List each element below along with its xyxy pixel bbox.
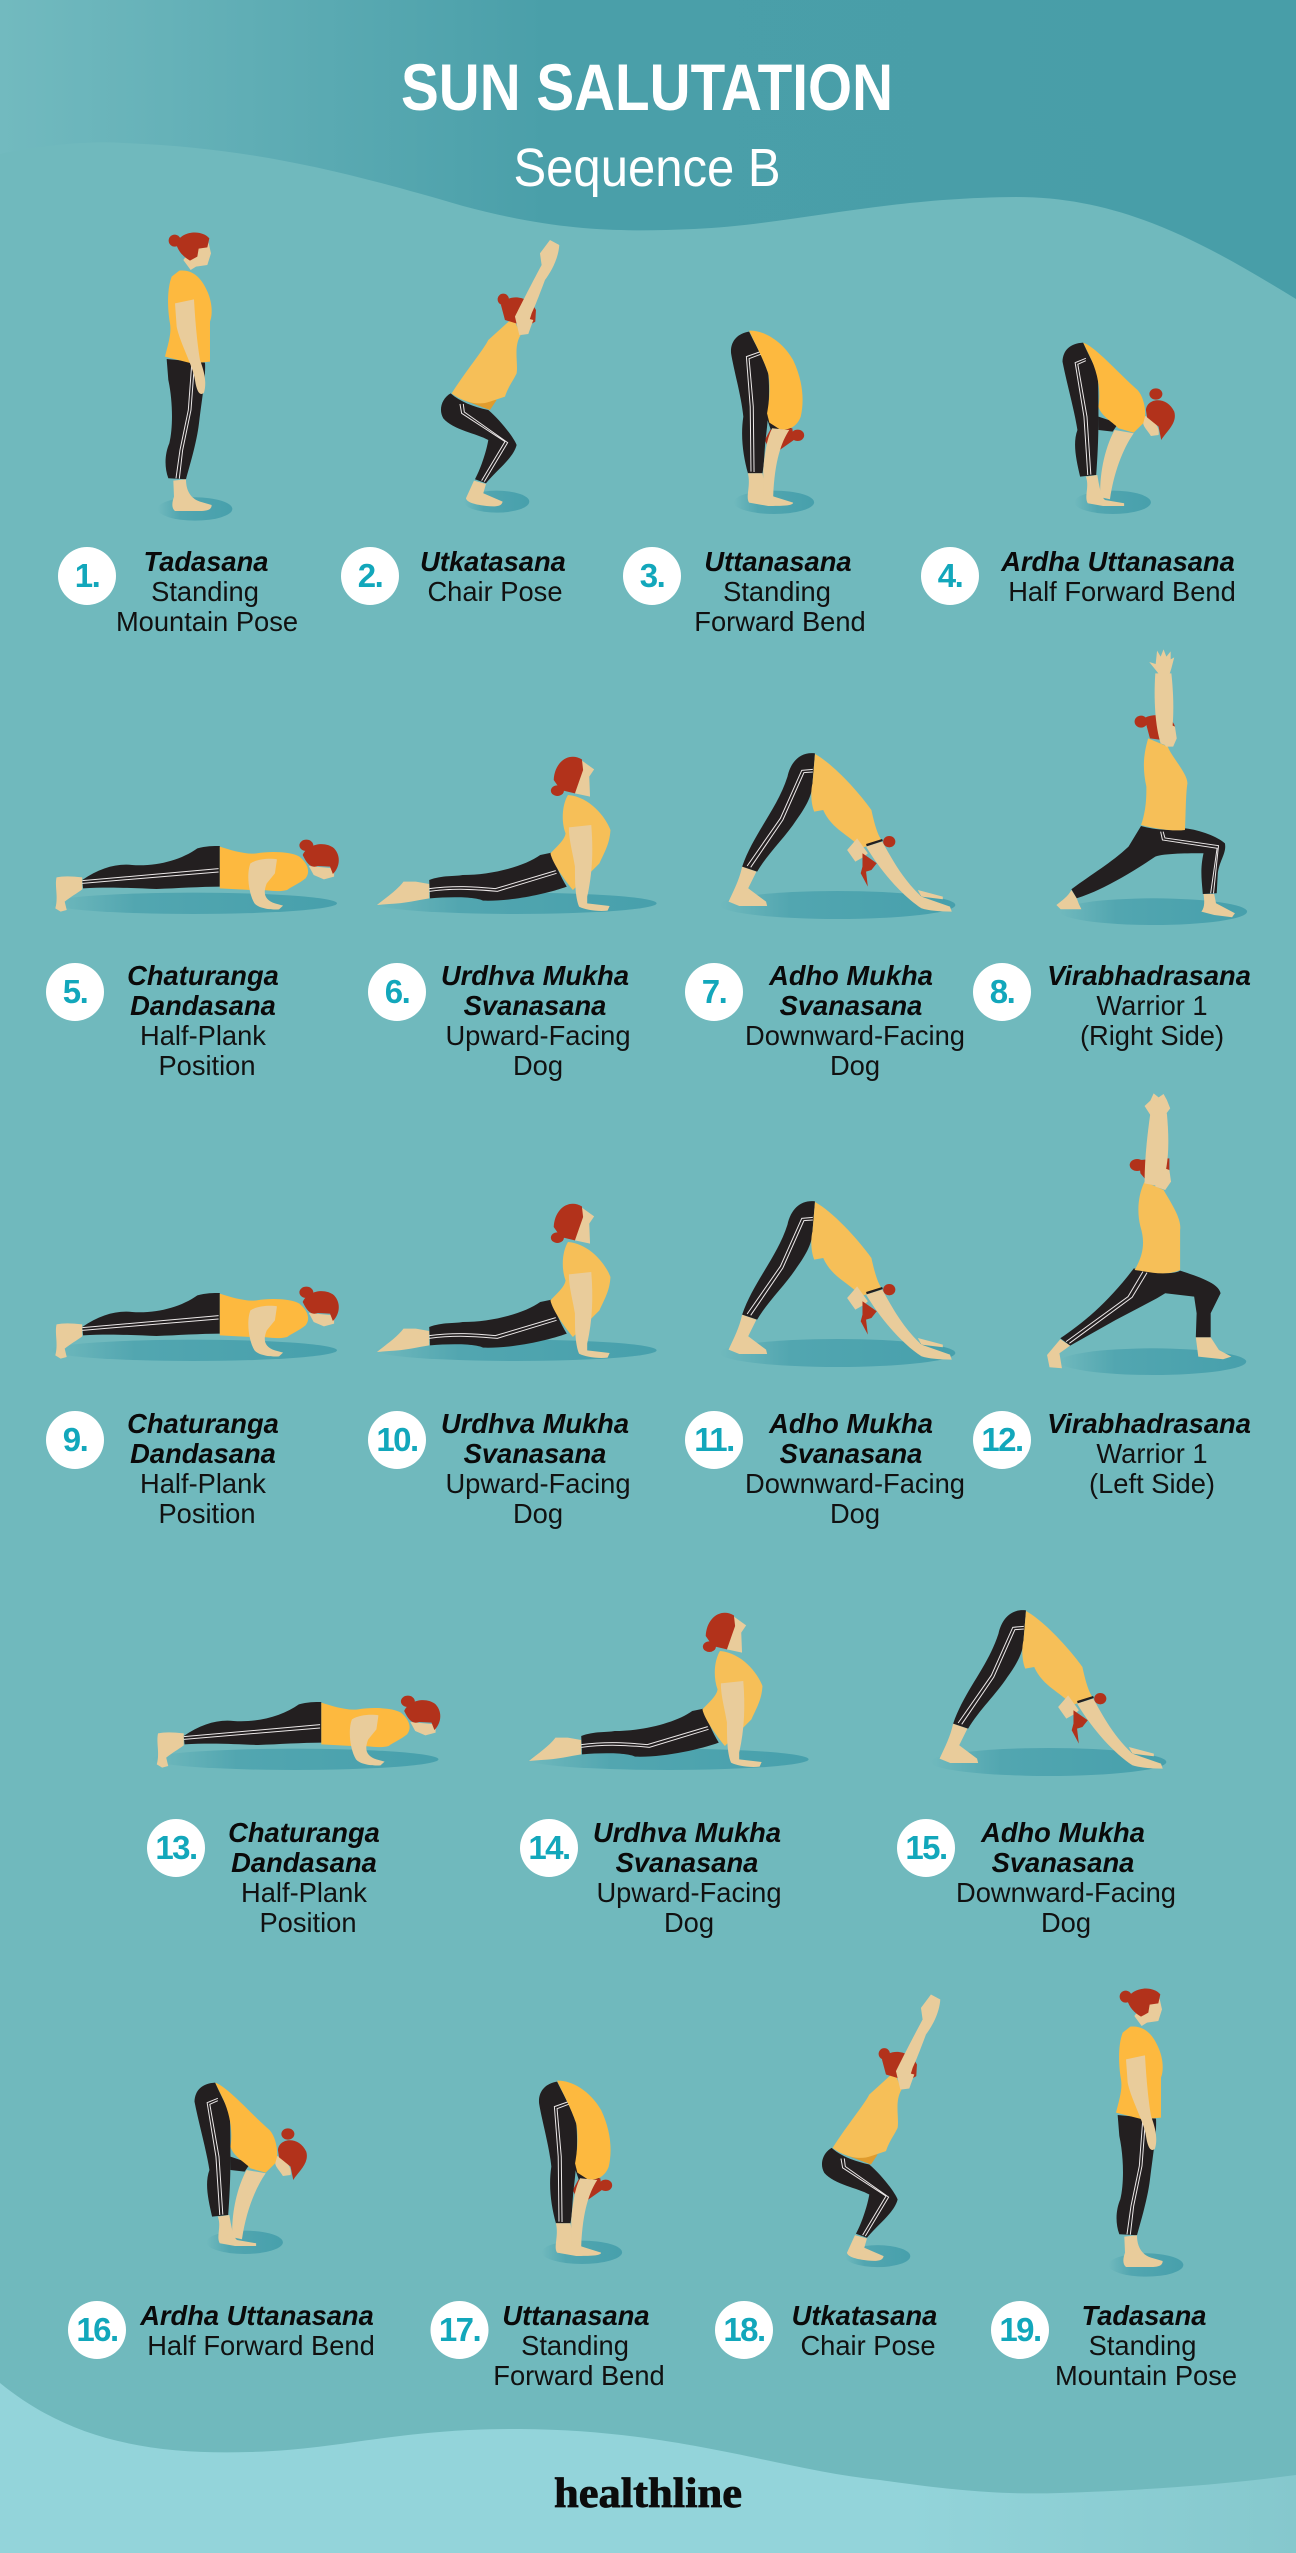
caption 10: Dog [513,1498,563,1529]
caption 15: Adho Mukha [980,1817,1145,1848]
number badge 19 [991,2301,1049,2359]
number badge 19: 19. [999,2311,1041,2348]
figure: Virabhadrasana left [1047,1093,1246,1375]
caption 17: Standing [521,2330,629,2361]
figure: Urdhva Mukha Svanasana [527,1613,809,1770]
caption 16: Half Forward Bend [147,2330,375,2361]
number badge 17 [430,2301,488,2359]
caption 7 [745,960,965,1081]
caption 7: Adho Mukha [768,960,933,991]
caption 6: Svanasana [464,990,606,1021]
number badge 11: 11. [694,1421,734,1458]
number badge 17: 17. [439,2311,480,2348]
number badge 12 [973,1411,1031,1469]
healthline logo: healthline [554,2471,742,2517]
number badge 15: 15. [905,1829,947,1866]
number badge 1: 1. [75,557,99,594]
caption 6: Upward-Facing [445,1020,631,1051]
caption 11: Downward-Facing [745,1468,965,1499]
caption 8 [1047,960,1251,1051]
caption 13: Dandasana [231,1847,377,1878]
caption 2 [420,546,566,607]
caption 13: Position [259,1907,357,1938]
caption 16: Ardha Uttanasana [139,2300,374,2331]
caption 15 [956,1817,1176,1938]
number badge 3 [623,547,681,605]
step 8 [973,649,1251,1051]
number badge 18 [715,2301,773,2359]
caption 10 [441,1408,631,1529]
step 2 [341,240,566,607]
caption 6 [441,960,631,1081]
number badge 16 [68,2301,126,2359]
caption 8: (Right Side) [1080,1020,1224,1051]
caption 19: Standing [1089,2330,1196,2361]
number badge 14 [520,1819,578,1877]
caption 13: Chaturanga [228,1817,380,1848]
caption 9 [127,1408,279,1529]
step 12 [973,1093,1251,1499]
caption 18 [792,2300,937,2361]
number badge 3: 3. [640,557,664,594]
step 18 [715,1994,940,2361]
number badge 10 [368,1411,426,1469]
caption 12: Warrior 1 [1096,1438,1208,1469]
number badge 4 [921,547,979,605]
step 10 [368,1204,657,1529]
caption 9: Chaturanga [127,1408,279,1439]
number badge 6 [368,963,426,1021]
caption 11 [745,1408,965,1529]
number badge 9 [46,1411,104,1469]
step 7 [685,753,965,1081]
caption 14: Upward-Facing [596,1877,782,1908]
caption 2: Chair Pose [427,576,563,607]
caption 12 [1047,1408,1251,1499]
figure: Urdhva Mukha Svanasana [375,1204,657,1361]
step 5 [46,840,339,1081]
caption 18: Chair Pose [800,2330,936,2361]
caption 16 [139,2300,375,2361]
caption 5 [127,960,279,1081]
number badge 18: 18. [723,2311,765,2348]
caption 9: Dandasana [130,1438,276,1469]
number badge 2: 2. [358,557,382,594]
caption 19: Mountain Pose [1055,2360,1237,2391]
caption 19: Tadasana [1082,2300,1206,2331]
step 6 [368,757,657,1081]
caption 14: Svanasana [616,1847,758,1878]
step 4 [921,343,1236,607]
number badge 16: 16. [76,2311,118,2348]
number badge 1 [58,547,116,605]
step 13 [147,1696,440,1938]
number badge 12: 12. [981,1421,1023,1458]
caption 18: Utkatasana [792,2300,937,2331]
caption 10: Upward-Facing [445,1468,631,1499]
caption 12: Virabhadrasana [1047,1408,1251,1439]
figure: Adho Mukha Svanasana [720,1201,955,1367]
figure: Tadasana [1109,1989,1183,2277]
caption 13 [228,1817,380,1938]
number badge 6: 6. [385,973,409,1010]
caption 3: Forward Bend [694,606,866,637]
caption 14: Dog [664,1907,714,1938]
step 19 [991,1989,1237,2391]
number badge 8: 8. [990,973,1014,1010]
figure: Chaturanga Dandasana [50,840,339,914]
step 15 [897,1610,1176,1938]
number badge 5 [46,963,104,1021]
subtitle: Sequence B [514,138,780,198]
caption 4 [1000,546,1236,607]
caption 11: Svanasana [780,1438,922,1469]
caption 9: Position [158,1498,256,1529]
caption 6: Dog [513,1050,563,1081]
caption 7: Svanasana [780,990,922,1021]
figure: Adho Mukha Svanasana [931,1610,1166,1776]
number badge 13: 13. [155,1829,197,1866]
caption 15: Dog [1041,1907,1091,1938]
caption 17: Uttanasana [502,2300,650,2331]
number badge 4: 4. [938,557,962,594]
number badge 13 [147,1819,205,1877]
step 17 [430,2081,665,2391]
caption 11: Dog [830,1498,880,1529]
caption 3: Standing [723,576,831,607]
caption 8: Warrior 1 [1096,990,1208,1021]
figure: Urdhva Mukha Svanasana [375,757,657,914]
caption 6: Urdhva Mukha [441,960,629,991]
step 1 [58,233,298,637]
figure: Uttanasana [539,2081,622,2264]
caption 15: Downward-Facing [956,1877,1176,1908]
caption 11: Adho Mukha [768,1408,933,1439]
number badge 7 [685,963,743,1021]
figure: Ardha Uttanasana [1063,343,1175,514]
step 16 [68,2083,375,2361]
caption 4: Half Forward Bend [1008,576,1236,607]
figure: Chaturanga Dandasana [50,1287,339,1361]
step 3 [623,331,866,637]
caption 19 [1055,2300,1237,2391]
caption 15: Svanasana [992,1847,1134,1878]
title: SUN SALUTATION [401,50,893,124]
caption 10: Urdhva Mukha [441,1408,629,1439]
caption 3 [694,546,866,637]
number badge 2 [341,547,399,605]
number badge 10: 10. [376,1421,418,1458]
caption 1: Mountain Pose [116,606,298,637]
figure: Tadasana [158,233,232,521]
caption 7: Downward-Facing [745,1020,965,1051]
number badge 14: 14. [528,1829,570,1866]
caption 2: Utkatasana [420,546,566,577]
figure: Chaturanga Dandasana [151,1696,440,1770]
step 14 [520,1613,809,1938]
caption 13: Half-Plank [241,1877,367,1908]
caption 9: Half-Plank [140,1468,266,1499]
caption 8: Virabhadrasana [1047,960,1251,991]
number badge 7: 7. [702,973,726,1010]
figure: Utkatasana [822,1994,940,2267]
figure: Utkatasana [441,240,559,513]
caption 1: Tadasana [144,546,268,577]
caption 17 [493,2300,665,2391]
caption 10: Svanasana [464,1438,606,1469]
caption 3: Uttanasana [704,546,852,577]
caption 12: (Left Side) [1089,1468,1215,1499]
figure: Ardha Uttanasana [195,2083,307,2254]
bottom wave footer band [0,2383,1296,2553]
top wave header band [0,0,1296,299]
caption 5: Position [158,1050,256,1081]
caption 17: Forward Bend [493,2360,665,2391]
caption 5: Chaturanga [127,960,279,991]
figure: Virabhadrasana right [1056,649,1247,925]
caption 14: Urdhva Mukha [593,1817,781,1848]
caption 1: Standing [151,576,259,607]
caption 4: Ardha Uttanasana [1000,546,1235,577]
step 11 [685,1201,965,1529]
step 9 [46,1287,339,1529]
number badge 8 [973,963,1031,1021]
number badge 15 [897,1819,955,1877]
caption 5: Dandasana [130,990,276,1021]
number badge 11 [685,1411,743,1469]
caption 7: Dog [830,1050,880,1081]
figure: Adho Mukha Svanasana [720,753,955,919]
number badge 9: 9. [63,1421,87,1458]
caption 5: Half-Plank [140,1020,266,1051]
figure: Uttanasana [731,331,814,514]
caption 14 [593,1817,782,1938]
number badge 5: 5. [63,973,87,1010]
caption 1 [116,546,298,637]
